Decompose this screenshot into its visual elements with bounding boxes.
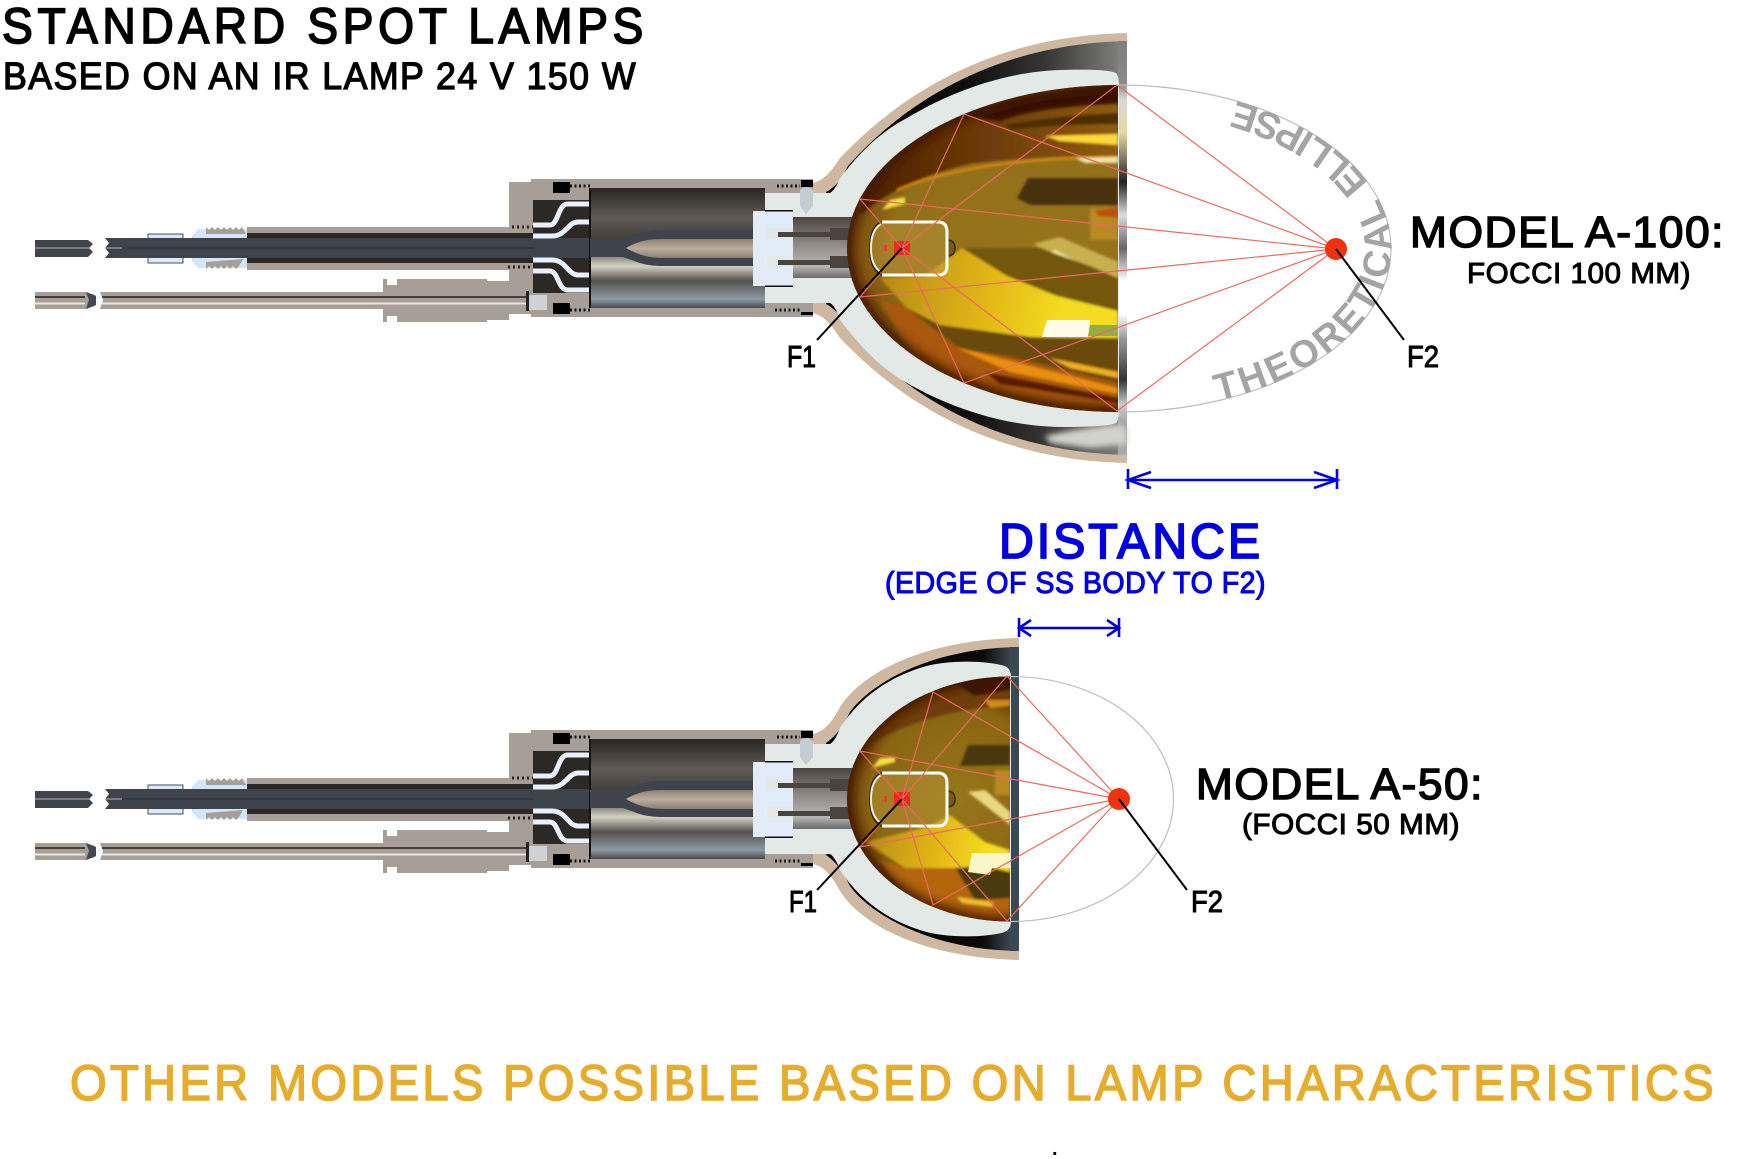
model A-50 heading: MODEL A-50:	[1196, 761, 1484, 809]
lamp A-50 diagram	[35, 638, 1223, 960]
lamp rear assembly	[35, 179, 813, 322]
distance note: (EDGE OF SS BODY TO F2)	[885, 566, 1266, 600]
light rays	[860, 85, 1336, 411]
stainless steel reflector body	[813, 638, 1019, 960]
poster	[1090, 208, 1118, 240]
stainless steel reflector body	[813, 33, 1127, 463]
lower dark olive band	[907, 308, 1118, 383]
model A-100 heading: MODEL A-100:	[1410, 209, 1725, 257]
F2 focal point	[1325, 238, 1347, 260]
lamp socket	[753, 180, 858, 315]
distance arrow lower	[1019, 618, 1119, 637]
lamp socket	[753, 731, 858, 866]
dark rim	[847, 85, 1118, 412]
F2 leader	[1336, 249, 1404, 340]
F2 label: F2	[1407, 340, 1439, 374]
F2 leader	[1119, 799, 1187, 890]
dark room rectangle	[1017, 178, 1118, 205]
golden reflector	[847, 676, 1010, 922]
theoretical ellipse outline	[1010, 676, 1174, 922]
yellow wedge	[882, 197, 905, 210]
curved label: THEORETICAL	[1212, 199, 1392, 399]
F1 label: F1	[787, 340, 816, 374]
distance arrow upper	[1128, 469, 1337, 489]
curved label: ELLIPSE	[1230, 101, 1367, 198]
orange lower rim	[880, 300, 1118, 415]
upper amber zone	[860, 85, 1118, 215]
golden reflector	[847, 85, 1118, 412]
F1 leader	[817, 248, 902, 340]
F2 focal point	[1108, 788, 1130, 810]
lamp rear assembly	[35, 730, 813, 873]
lamp A-100 diagram	[35, 33, 1439, 463]
F1 label: F1	[789, 885, 817, 919]
model A-100 focci: FOCCI 100 MM)	[1467, 258, 1691, 290]
subtitle: BASED ON AN IR LAMP 24 V 150 W	[3, 56, 637, 98]
upper right pale window	[1033, 237, 1118, 280]
ceramic lining	[765, 662, 1011, 936]
big dark olive diagonal	[960, 248, 1118, 311]
distance heading: DISTANCE	[999, 514, 1263, 569]
bright yellow band	[880, 248, 1118, 340]
model A-50 focci: (FOCCI 50 MM)	[1242, 809, 1460, 841]
F2 label: F2	[1191, 885, 1223, 919]
curved label	[1212, 101, 1392, 399]
theoretical ellipse outline	[1119, 85, 1391, 412]
light rays	[860, 676, 1119, 921]
F1 leader	[817, 799, 902, 890]
lamp capsule	[870, 773, 955, 826]
lamp capsule	[870, 222, 955, 275]
ceramic lining	[765, 70, 1119, 427]
